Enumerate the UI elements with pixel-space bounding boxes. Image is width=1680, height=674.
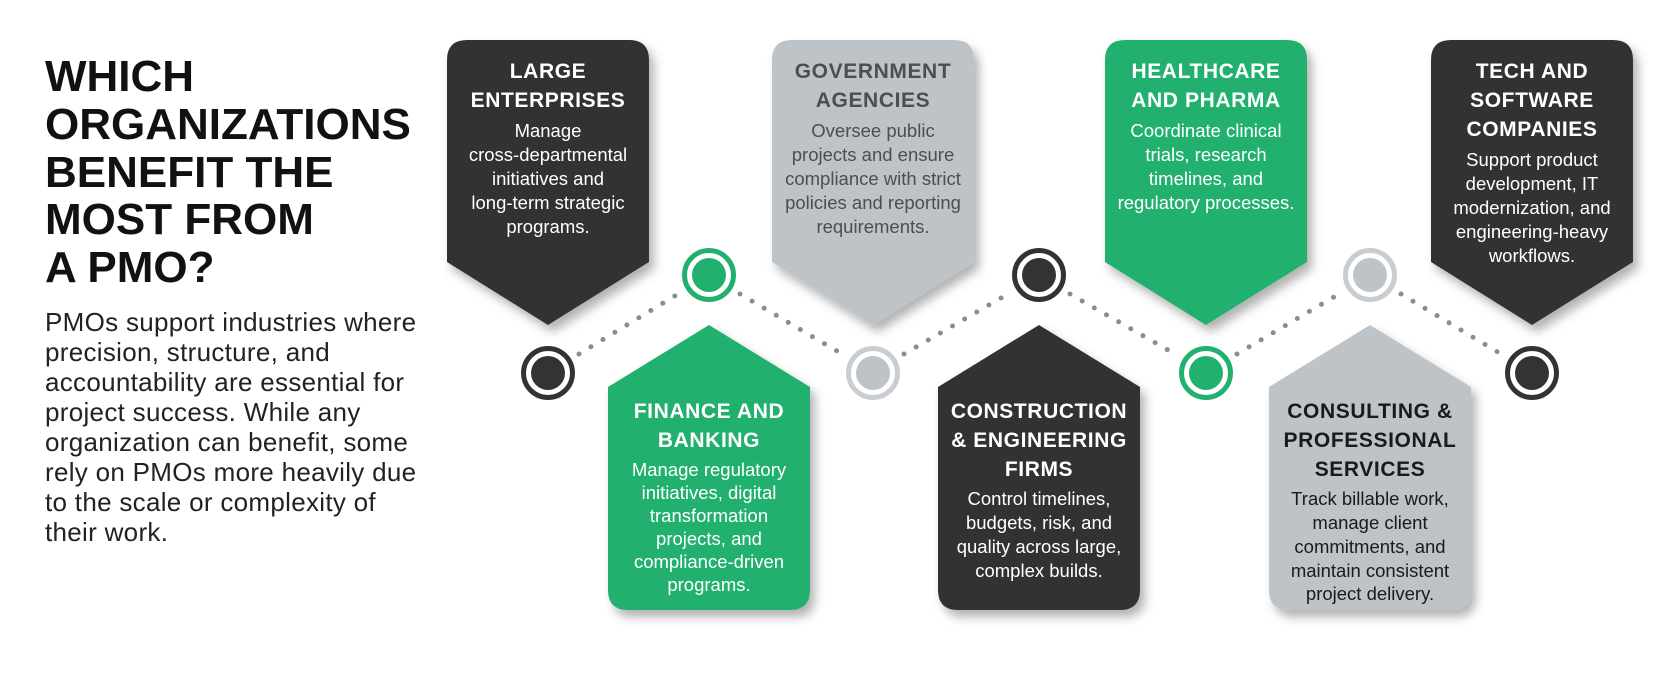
intro paragraph: project success. While any bbox=[45, 397, 361, 427]
card: large enterprises: ENTERPRISES bbox=[471, 89, 625, 112]
card: large enterprises: long-term strategic bbox=[471, 192, 625, 213]
card: consulting and professional services: CONSULTING & bbox=[1287, 400, 1453, 423]
intro paragraph: accountability are essential for bbox=[45, 367, 404, 397]
card: large enterprises: cross-departmental bbox=[469, 144, 627, 165]
card: tech and software companies: engineering-heavy bbox=[1456, 221, 1609, 242]
card: government agencies bbox=[772, 40, 974, 325]
node circles bbox=[524, 250, 1556, 398]
card: construction and engineering firms: complex builds. bbox=[975, 560, 1103, 581]
card: finance and banking: Manage regulatory bbox=[632, 459, 787, 480]
title: MOST FROM bbox=[45, 195, 314, 244]
title bbox=[45, 52, 411, 292]
card: construction and engineering firms: FIRMS bbox=[1005, 458, 1073, 481]
card: government agencies: policies and reporting bbox=[785, 192, 961, 213]
title: BENEFIT THE bbox=[45, 148, 333, 197]
card: finance and banking: programs. bbox=[667, 574, 751, 595]
card: healthcare and pharma: Coordinate clinical bbox=[1130, 120, 1282, 141]
intro paragraph: to the scale or complexity of bbox=[45, 487, 376, 517]
card: finance and banking: initiatives, digital bbox=[642, 482, 776, 503]
title: WHICH bbox=[45, 52, 194, 101]
card: large enterprises: initiatives and bbox=[492, 168, 604, 189]
card: government agencies: projects and ensure bbox=[792, 144, 954, 165]
card: tech and software companies: development, IT bbox=[1466, 173, 1598, 194]
card: finance and banking: BANKING bbox=[658, 429, 760, 452]
card: tech and software companies: modernization, and bbox=[1453, 197, 1611, 218]
card: large enterprises: Manage bbox=[515, 120, 581, 141]
card: consulting and professional services: Track billable work, bbox=[1291, 488, 1449, 509]
card: government agencies: Oversee public bbox=[811, 120, 935, 141]
card: tech and software companies: SOFTWARE bbox=[1470, 89, 1594, 112]
intro paragraph: precision, structure, and bbox=[45, 337, 330, 367]
card: government agencies: GOVERNMENT bbox=[795, 60, 951, 83]
card: finance and banking: FINANCE AND bbox=[634, 400, 784, 423]
card: tech and software companies: TECH AND bbox=[1476, 60, 1588, 83]
card: healthcare and pharma: regulatory processes. bbox=[1118, 192, 1294, 213]
card: government agencies: AGENCIES bbox=[816, 89, 930, 112]
card: construction and engineering firms: Control timelines, bbox=[968, 488, 1110, 509]
intro paragraph: rely on PMOs more heavily due bbox=[45, 457, 416, 487]
card: consulting and professional services bbox=[1269, 325, 1471, 610]
card: tech and software companies bbox=[1431, 40, 1633, 325]
intro paragraph: their work. bbox=[45, 517, 168, 547]
card: healthcare and pharma: HEALTHCARE bbox=[1131, 60, 1281, 83]
intro paragraph: PMOs support industries where bbox=[45, 307, 416, 337]
card: construction and engineering firms: budgets, risk, and bbox=[966, 512, 1112, 533]
card: healthcare and pharma bbox=[1105, 40, 1307, 325]
card: construction and engineering firms bbox=[938, 325, 1140, 610]
title: ORGANIZATIONS bbox=[45, 100, 411, 149]
card: consulting and professional services: project delivery. bbox=[1306, 583, 1434, 604]
card: tech and software companies: workflows. bbox=[1488, 245, 1575, 266]
intro paragraph: organization can benefit, some bbox=[45, 427, 408, 457]
card: consulting and professional services: SERVICES bbox=[1315, 458, 1425, 481]
card: tech and software companies: COMPANIES bbox=[1466, 118, 1598, 141]
card: consulting and professional services: manage client bbox=[1312, 512, 1428, 533]
card: consulting and professional services: commitments, and bbox=[1294, 536, 1446, 557]
dotted connector lines bbox=[579, 294, 1501, 354]
card: consulting and professional services: maintain consistent bbox=[1291, 560, 1449, 581]
card: finance and banking bbox=[608, 325, 810, 610]
card: large enterprises bbox=[447, 40, 649, 325]
card: finance and banking: compliance-driven bbox=[634, 551, 784, 572]
card: tech and software companies: Support product bbox=[1466, 149, 1598, 170]
card: large enterprises: LARGE bbox=[510, 60, 586, 83]
card: large enterprises: programs. bbox=[506, 216, 590, 237]
card: healthcare and pharma: timelines, and bbox=[1149, 168, 1263, 189]
card: construction and engineering firms: & ENGINEERING bbox=[951, 429, 1127, 452]
intro paragraph bbox=[45, 307, 416, 547]
card: construction and engineering firms: quality across large, bbox=[957, 536, 1121, 557]
card: finance and banking: projects, and bbox=[656, 528, 762, 549]
card: consulting and professional services: PROFESSIONAL bbox=[1284, 429, 1456, 452]
card: government agencies: requirements. bbox=[816, 216, 930, 237]
card: government agencies: compliance with strict bbox=[785, 168, 961, 189]
card: finance and banking: transformation bbox=[650, 505, 768, 526]
card: construction and engineering firms: CONSTRUCTION bbox=[951, 400, 1127, 423]
card: healthcare and pharma: AND PHARMA bbox=[1131, 89, 1281, 112]
card: healthcare and pharma: trials, research bbox=[1145, 144, 1267, 165]
title: A PMO? bbox=[45, 243, 214, 292]
